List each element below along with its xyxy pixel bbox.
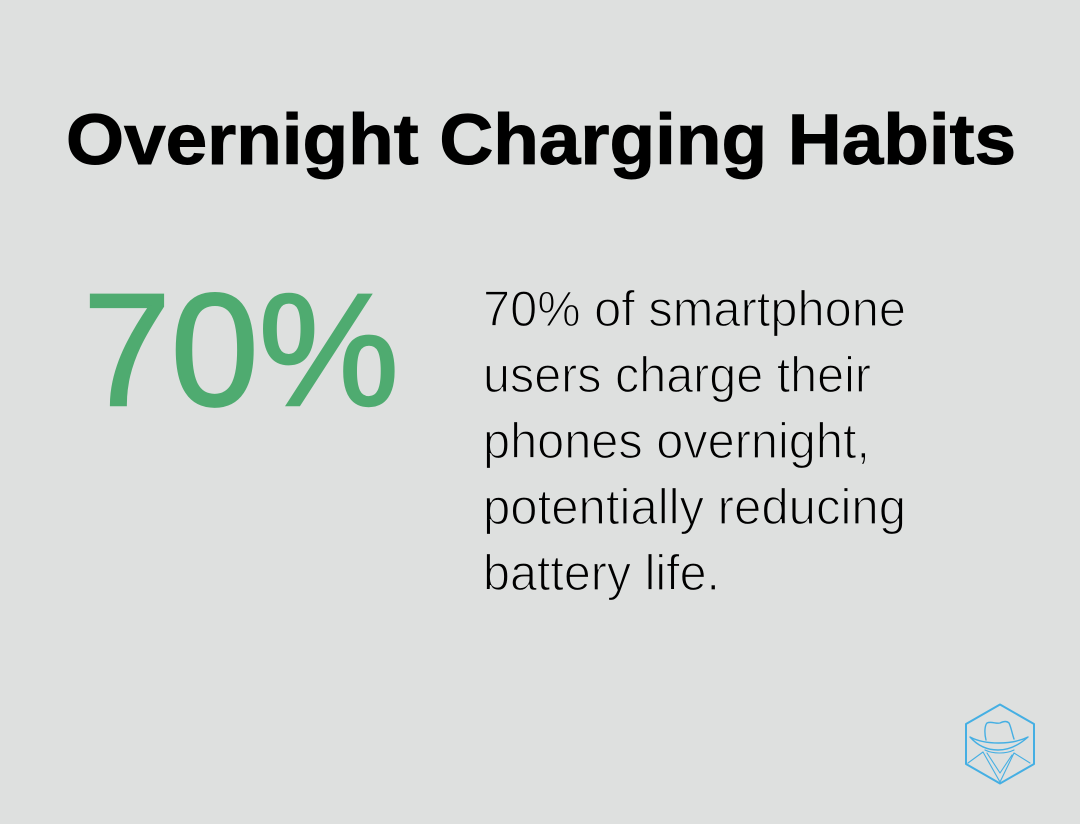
description text: 70% of smartphone xyxy=(483,281,906,337)
icon: hexagon logo with hat and spy xyxy=(966,704,1034,784)
description text: potentially reducing xyxy=(483,479,906,535)
icon: hat xyxy=(970,722,1028,750)
description text: phones overnight, xyxy=(483,413,870,469)
big statistic: 70%: 70% xyxy=(83,260,399,439)
icon: collar lines xyxy=(968,750,1030,782)
title: Overnight Charging Habits xyxy=(66,101,1016,180)
description text xyxy=(483,281,906,601)
description text: users charge their xyxy=(483,347,871,403)
icon: hexagon outline xyxy=(966,704,1034,784)
description text: battery life. xyxy=(483,545,720,601)
